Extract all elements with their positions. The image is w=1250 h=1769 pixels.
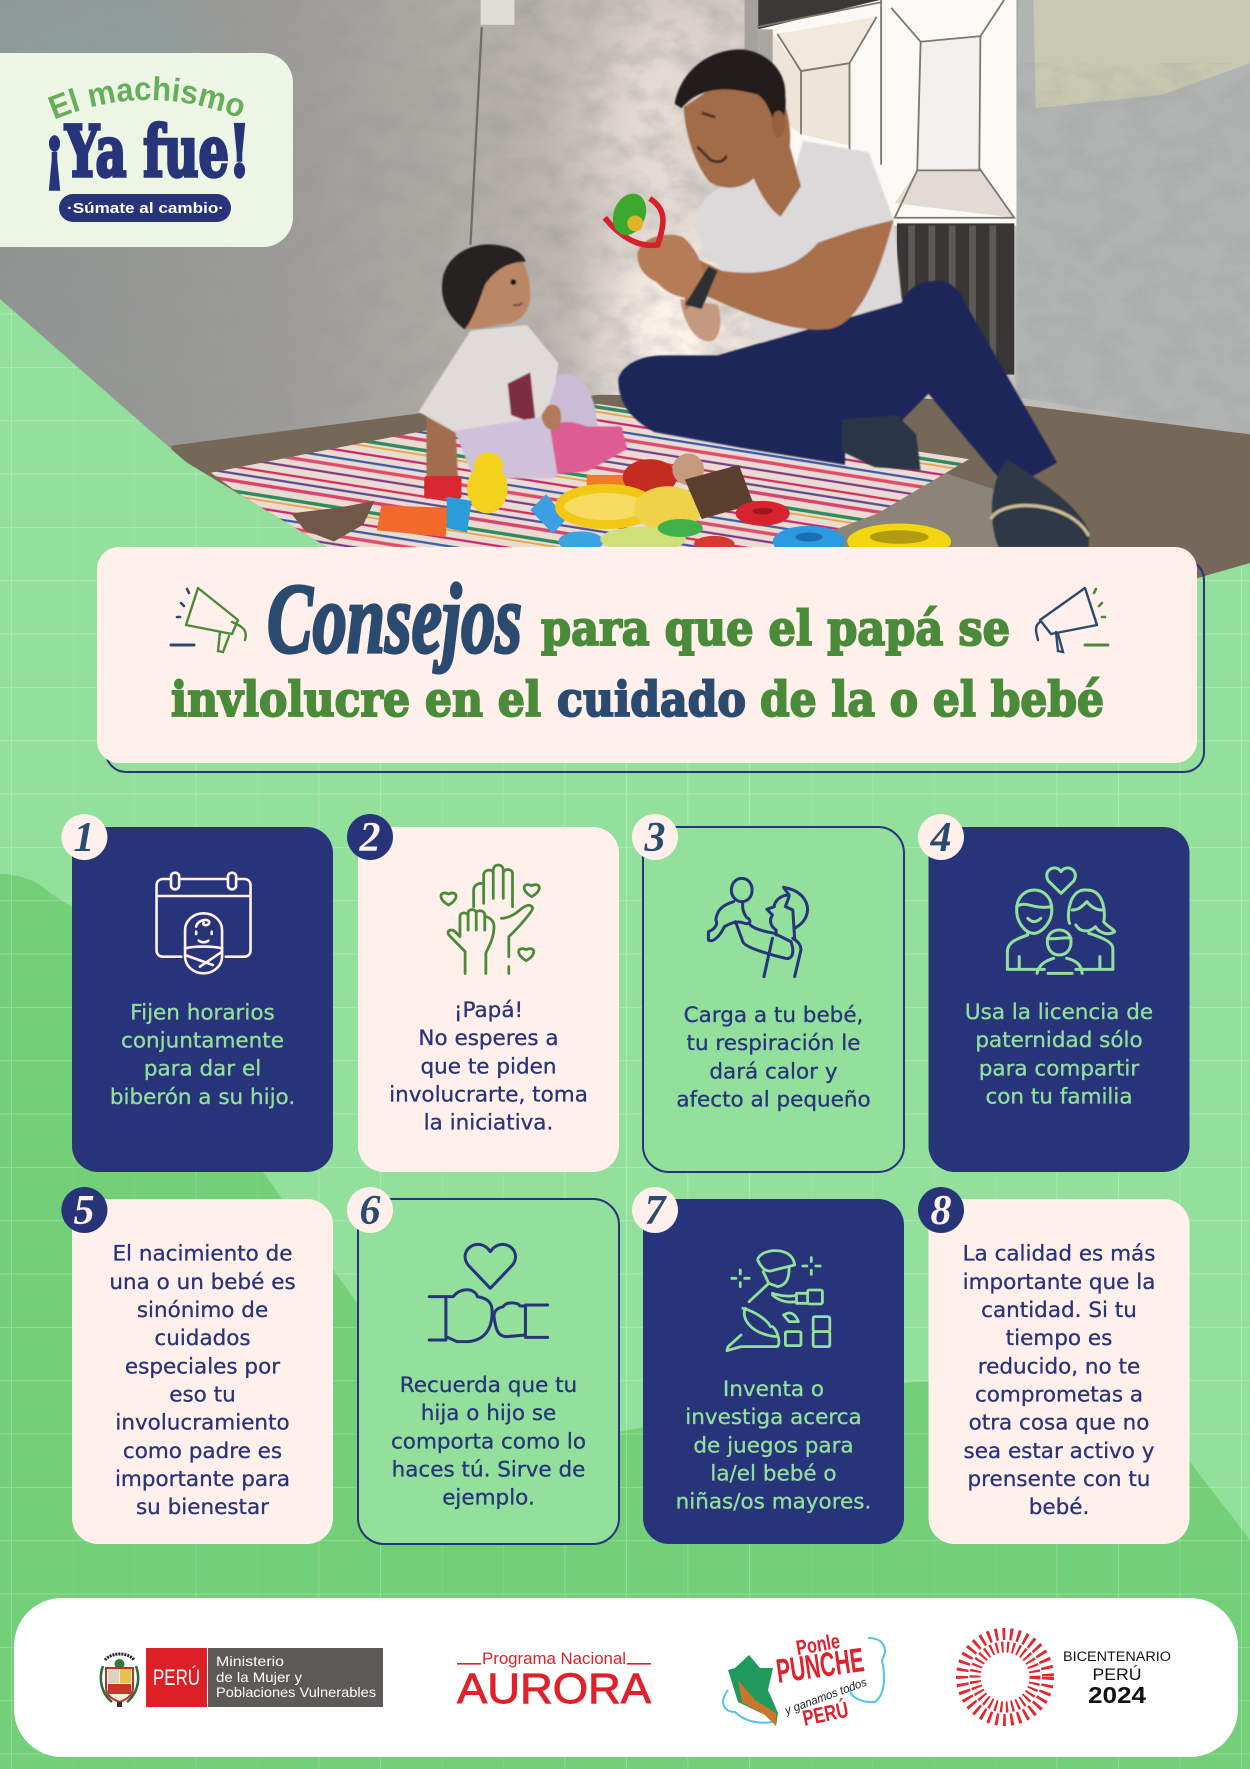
card 7: la/el bebé o (710, 1462, 837, 1487)
card 5: sinónimo de (137, 1298, 268, 1323)
wire and box on wall (470, 0, 514, 245)
card 1 (61, 814, 333, 1172)
rattle (605, 189, 663, 245)
card 8: otra cosa que no (969, 1411, 1149, 1436)
card 3: tu respiración le (687, 1031, 860, 1056)
card 2: la iniciativa. (424, 1111, 553, 1136)
card 4: para compartir (979, 1056, 1139, 1081)
card 8: comprometas a (975, 1383, 1143, 1408)
icon: adult lifting baby (708, 878, 808, 977)
icon: hands and hearts (441, 865, 539, 973)
card 6: ejemplo. (442, 1486, 535, 1511)
logo: Bicentenario Perú 2024 (962, 1634, 1171, 1720)
logo: Programa Nacional Aurora: AURORA (457, 1665, 651, 1713)
card 8: La calidad es más (963, 1242, 1155, 1267)
heading line 2 (171, 672, 1104, 728)
card 2: No esperes a (418, 1026, 559, 1051)
card 3 (632, 814, 904, 1172)
card 6: Recuerda que tu (400, 1373, 577, 1398)
icon: navy megaphone (1036, 588, 1108, 652)
card 2: 2 (358, 815, 380, 861)
heading line 2: de la o el bebé (760, 672, 1104, 728)
card 5 (61, 1187, 333, 1544)
logo panel: El machismo ya fue (0, 53, 293, 247)
logo: Ponle Punche Perú (723, 1630, 885, 1731)
card 1: Fijen horarios (130, 1000, 275, 1025)
card 6: haces tú. Sirve de (392, 1458, 585, 1483)
card 5: El nacimiento de (112, 1242, 293, 1267)
card 8: importante que la (963, 1270, 1155, 1295)
card 8: cantidad. Si tu (981, 1298, 1137, 1323)
card 5: importante para (115, 1467, 290, 1492)
card 8: prensente con tu (968, 1467, 1150, 1492)
logo: Ministerio de la Mujer: Poblaciones Vulnerables (216, 1684, 376, 1700)
card 3: afecto al pequeño (676, 1088, 871, 1113)
icon: child stacking blocks (727, 1251, 830, 1351)
card 8 (918, 1187, 1190, 1544)
logo panel: El machismo ya fue: El machismo (48, 76, 244, 119)
floor (172, 394, 1250, 578)
card 4: 4 (930, 815, 952, 861)
card 1: 1 (74, 815, 94, 861)
card 6: 6 (360, 1188, 380, 1234)
card 5: especiales por (125, 1354, 280, 1379)
card 8: bebé. (1029, 1495, 1089, 1520)
card 4: paternidad sólo (975, 1028, 1143, 1053)
card 5: involucramiento (115, 1411, 290, 1436)
logo: Ministerio de la Mujer (101, 1648, 383, 1707)
card 3: Carga a tu bebé, (684, 1003, 863, 1028)
wall texture (428, 0, 1196, 420)
card 7: 7 (644, 1188, 668, 1234)
logo: Ponle Punche Perú: y ganamos todos (782, 1675, 869, 1718)
photo: father playing with baby on a striped blanket (0, 0, 1250, 632)
icon: green megaphone (171, 588, 246, 652)
child (419, 244, 627, 486)
card 1: biberón a su hijo. (110, 1085, 295, 1110)
icon: coat of arms (101, 1654, 138, 1707)
card 7: de juegos para (693, 1433, 854, 1458)
card 7: niñas/os mayores. (676, 1490, 871, 1515)
card 3: dará calor y (709, 1059, 838, 1084)
logo: Ponle Punche Perú: PERÚ (800, 1697, 851, 1731)
heading line 1: para que el papá se (541, 601, 1010, 657)
card 7: Inventa o (723, 1377, 824, 1402)
card 2 (347, 814, 619, 1172)
card 1: conjuntamente (121, 1028, 284, 1053)
icon: family with heart (1007, 868, 1115, 973)
logo: Ministerio de la Mujer: PERÚ (153, 1665, 200, 1690)
card 3: 3 (644, 815, 666, 861)
card 4 (918, 814, 1190, 1172)
card 7 (632, 1187, 904, 1544)
logo panel: El machismo ya fue: ¡Ya fue! (44, 110, 250, 193)
card 5: como padre es (123, 1439, 282, 1464)
card 2: que te piden (421, 1054, 556, 1079)
toys (291, 452, 952, 547)
card 2: ¡Papá! (454, 998, 523, 1023)
window (757, 0, 1018, 375)
logo: Bicentenario Perú 2024: 2024 (1088, 1682, 1146, 1708)
card 4: Usa la licencia de (965, 1000, 1153, 1025)
heading line 2: cuidado (557, 672, 746, 728)
logo: Bicentenario Perú 2024: BICENTENARIO (1063, 1649, 1171, 1664)
man (618, 49, 1089, 547)
right wall and curtain (1016, 0, 1142, 414)
logo: Ponle Punche Perú: PUNCHE (774, 1641, 866, 1691)
card 5: 5 (74, 1188, 94, 1234)
card 8: reducido, no te (978, 1354, 1140, 1379)
heading word: Consejos: Consejos (267, 563, 522, 674)
blanket (211, 404, 969, 553)
card 6 (347, 1187, 619, 1544)
icon: baby calendar (157, 873, 251, 973)
title panel (97, 547, 1204, 772)
logo: Ponle Punche Perú: Ponle (794, 1630, 842, 1660)
card 7: investiga acerca (685, 1405, 862, 1430)
card 6: comporta como lo (391, 1429, 586, 1454)
card 2: involucrarte, toma (389, 1083, 588, 1108)
footer panel with logos (14, 1598, 1238, 1757)
logo: Bicentenario Perú 2024: PERÚ (1092, 1665, 1142, 1684)
card 8: sea estar activo y (964, 1439, 1155, 1464)
card 5: cuidados (154, 1326, 251, 1351)
heading line 2: invlolucre en el (171, 672, 541, 728)
card 8: 8 (930, 1188, 952, 1234)
card 5: eso tu (169, 1383, 236, 1408)
card 6: hija o hijo se (421, 1401, 556, 1426)
logo: Programa Nacional Aurora: Programa Nacional (482, 1649, 626, 1668)
logo: Ministerio de la Mujer: de la Mujer y (216, 1669, 302, 1685)
card 5: una o un bebé es (109, 1270, 296, 1295)
icon: fist bump with heart (429, 1244, 548, 1342)
card 5: su bienestar (136, 1495, 269, 1520)
logo: Ministerio de la Mujer: Ministerio (216, 1653, 284, 1669)
card 4: con tu familia (985, 1085, 1133, 1110)
card 8: tiempo es (1006, 1326, 1112, 1351)
logo panel: El machismo ya fue: ·Súmate al cambio· (67, 201, 224, 217)
card 1: para dar el (144, 1057, 261, 1082)
